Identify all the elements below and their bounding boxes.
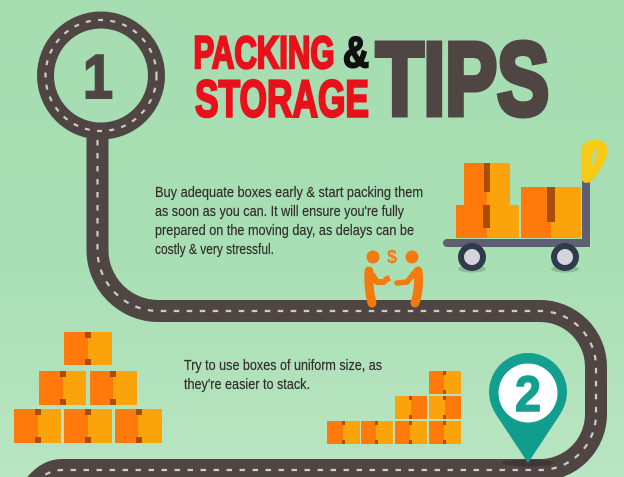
icon: map pin with number 2 (489, 353, 567, 466)
text block: buy boxes early: costly & very stressful. (155, 241, 274, 258)
text block: buy boxes early (155, 184, 423, 258)
text block: buy boxes early: prepared on the moving day, as delays can be (155, 222, 414, 239)
title: STORAGE (195, 70, 369, 128)
title: PACKING (194, 27, 334, 78)
number 1: 1 (83, 43, 113, 112)
text block: uniform boxes: Try to use boxes of uniform size, as (184, 357, 382, 374)
title: TIPS (376, 22, 549, 136)
icon: pyramid of boxes (14, 332, 162, 443)
text block: buy boxes early: as soon as you can. It will ensure you're fully (155, 203, 404, 220)
text block: buy boxes early: Buy adequate boxes early & start packing them (155, 184, 423, 201)
icon: two people exchanging money: $ (387, 247, 397, 267)
text block: uniform boxes: they're easier to stack. (184, 376, 310, 393)
icon: map pin with number 2: 2 (515, 366, 541, 422)
title: & (343, 28, 369, 77)
text block: uniform boxes (184, 357, 382, 393)
icon: two people exchanging money (366, 247, 419, 303)
icon: staircase of boxes (327, 371, 461, 444)
title (194, 22, 549, 136)
icon: hand cart with boxes (443, 140, 607, 272)
